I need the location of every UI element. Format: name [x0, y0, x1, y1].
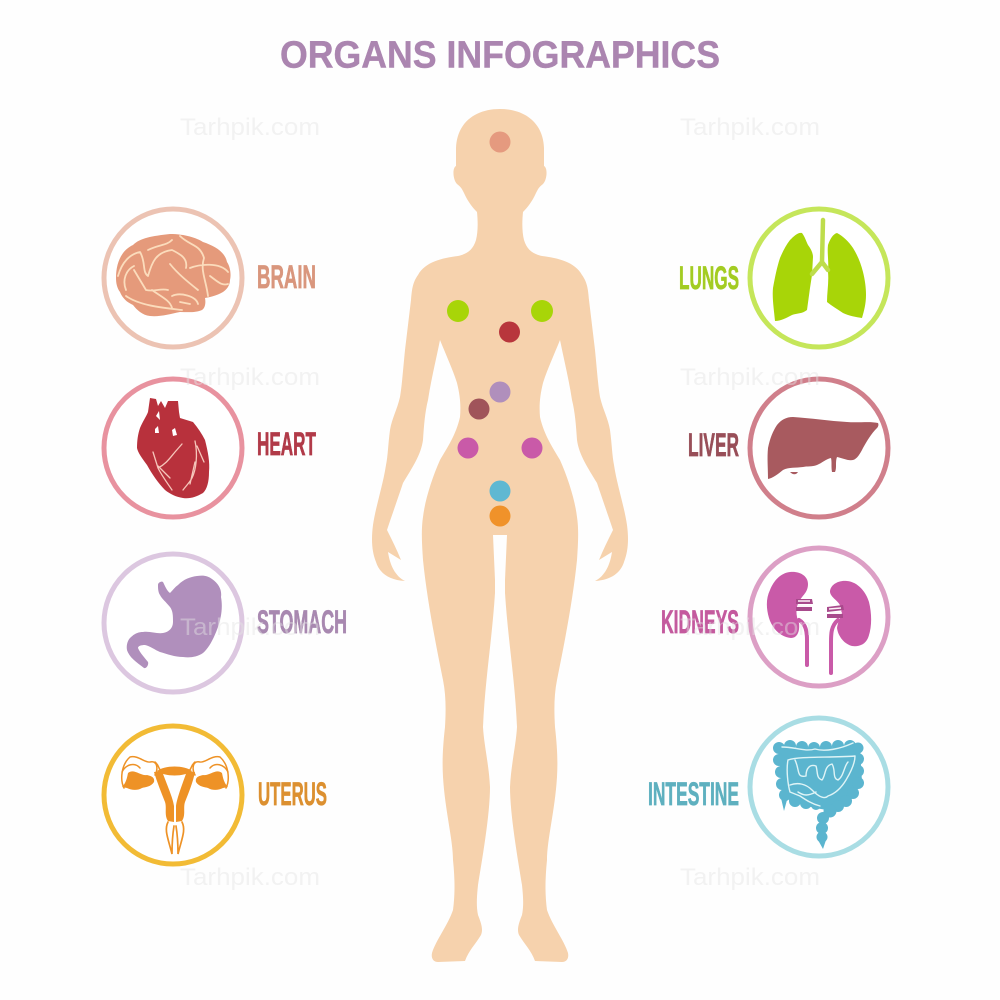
uterus ring	[104, 726, 242, 864]
icon: kidneys	[767, 572, 871, 673]
icon: liver	[768, 417, 878, 479]
panel: stomach	[104, 554, 347, 692]
intestine label: INTESTINE	[648, 776, 739, 812]
panel: liver	[688, 379, 888, 517]
panel: intestine	[648, 718, 888, 856]
stomach ring	[104, 554, 242, 692]
organ marker: right lung	[531, 300, 553, 322]
organ marker: heart	[499, 322, 520, 342]
liver ring	[750, 379, 888, 517]
icon: brain	[116, 234, 231, 316]
brain label: BRAIN	[257, 259, 316, 295]
panel: heart	[104, 379, 316, 517]
watermarks: Tarhpik.com	[180, 114, 320, 141]
watermarks: Tarhpik.com	[180, 614, 320, 641]
intestine ring	[750, 718, 888, 856]
icon: intestine	[773, 740, 864, 849]
organ marker: uterus	[490, 506, 510, 526]
kidneys ring	[750, 548, 888, 686]
uterus label: UTERUS	[258, 776, 327, 812]
panel: uterus	[104, 726, 327, 864]
lungs ring	[750, 209, 888, 347]
panel: lungs	[679, 209, 888, 347]
human body figure	[372, 109, 628, 962]
stomach label: STOMACH	[257, 604, 347, 640]
icon: heart	[137, 398, 209, 498]
watermarks: Tarhpik.com	[180, 364, 320, 391]
organ marker: left kidney	[458, 438, 478, 458]
icon: lungs	[773, 220, 866, 321]
watermarks: Tarhpik.com	[680, 114, 820, 141]
brain ring	[104, 209, 242, 347]
heart label: HEART	[257, 426, 316, 462]
organ marker: intestine	[490, 480, 510, 502]
panel: kidneys	[661, 548, 888, 686]
title: ORGANS INFOGRAPHICS	[280, 34, 720, 76]
lungs label: LUNGS	[679, 260, 739, 296]
body silhouette	[372, 109, 628, 962]
panel: brain	[104, 209, 316, 347]
organ marker: left lung	[447, 300, 469, 322]
watermarks	[180, 114, 820, 891]
watermarks: Tarhpik.com	[680, 864, 820, 891]
icon: uterus	[122, 757, 228, 854]
organ marker: stomach	[490, 382, 510, 402]
heart ring	[104, 379, 242, 517]
watermarks: Tarhpik.com	[180, 864, 320, 891]
organ marker: liver	[468, 398, 490, 420]
liver label: LIVER	[688, 427, 739, 463]
icon: stomach	[127, 576, 222, 668]
kidneys label: KIDNEYS	[661, 604, 739, 640]
watermarks: Tarhpik.com	[680, 364, 820, 391]
watermarks: Tarhpik.com	[680, 614, 820, 641]
organ marker: right kidney	[522, 438, 542, 458]
organ marker: brain	[490, 132, 510, 152]
